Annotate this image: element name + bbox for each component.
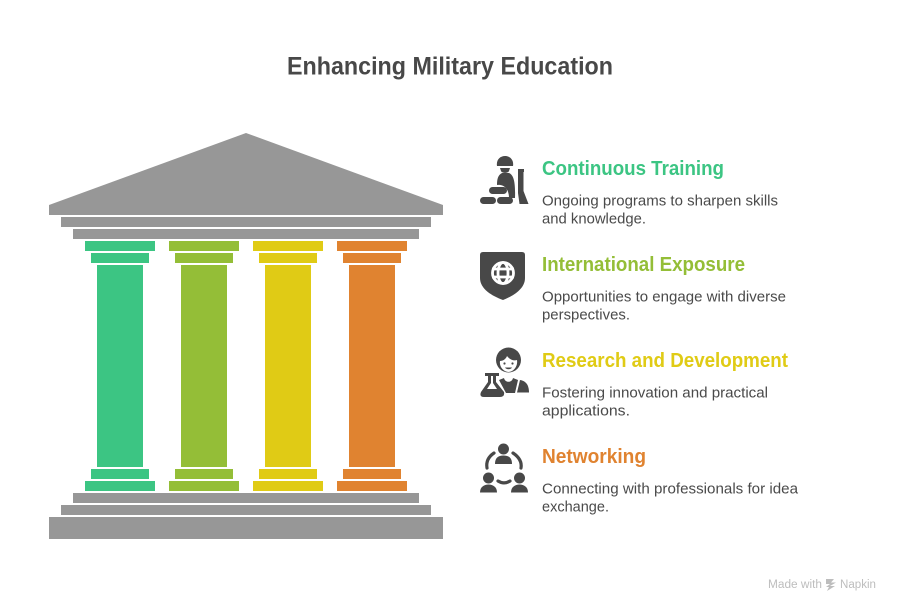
icon: networking people bbox=[480, 444, 528, 492]
text: Research and Development description: Fostering innovation and practical bbox=[542, 386, 768, 402]
text: Networking description: Connecting with professionals for idea bbox=[542, 482, 799, 498]
entablature steps bbox=[61, 217, 431, 239]
icon: researcher with flask bbox=[480, 348, 529, 397]
icon: napkin logo bbox=[826, 579, 836, 591]
column: orange bbox=[337, 241, 407, 491]
text: International Exposure description: perspectives. bbox=[542, 308, 630, 324]
text: Research and Development description: applications. bbox=[542, 404, 630, 420]
watermark bbox=[768, 579, 876, 591]
icon: globe shield bbox=[480, 252, 525, 300]
pediment roof bbox=[49, 133, 443, 215]
text: Continuous Training description: Ongoing programs to sharpen skills bbox=[542, 194, 778, 210]
column: yellow bbox=[253, 241, 323, 491]
watermark: Napkin bbox=[840, 579, 876, 591]
watermark: Made with bbox=[768, 579, 822, 591]
column: green bbox=[85, 241, 155, 491]
text: Networking description: exchange. bbox=[542, 500, 609, 516]
heading: International Exposure: International Exposure bbox=[542, 254, 745, 276]
heading: Research and Development: Research and Development bbox=[542, 350, 788, 372]
heading: Continuous Training: Continuous Training bbox=[542, 158, 724, 180]
text: International Exposure description: Opportunities to engage with diverse bbox=[542, 290, 786, 306]
text: Continuous Training description: and knowledge. bbox=[542, 212, 646, 228]
base steps bbox=[49, 493, 443, 539]
icon: soldier training bbox=[480, 156, 528, 204]
heading: Networking: Networking bbox=[542, 446, 646, 468]
column: lime bbox=[169, 241, 239, 491]
temple diagram bbox=[49, 133, 443, 539]
title: Enhancing Military Education bbox=[287, 52, 613, 80]
